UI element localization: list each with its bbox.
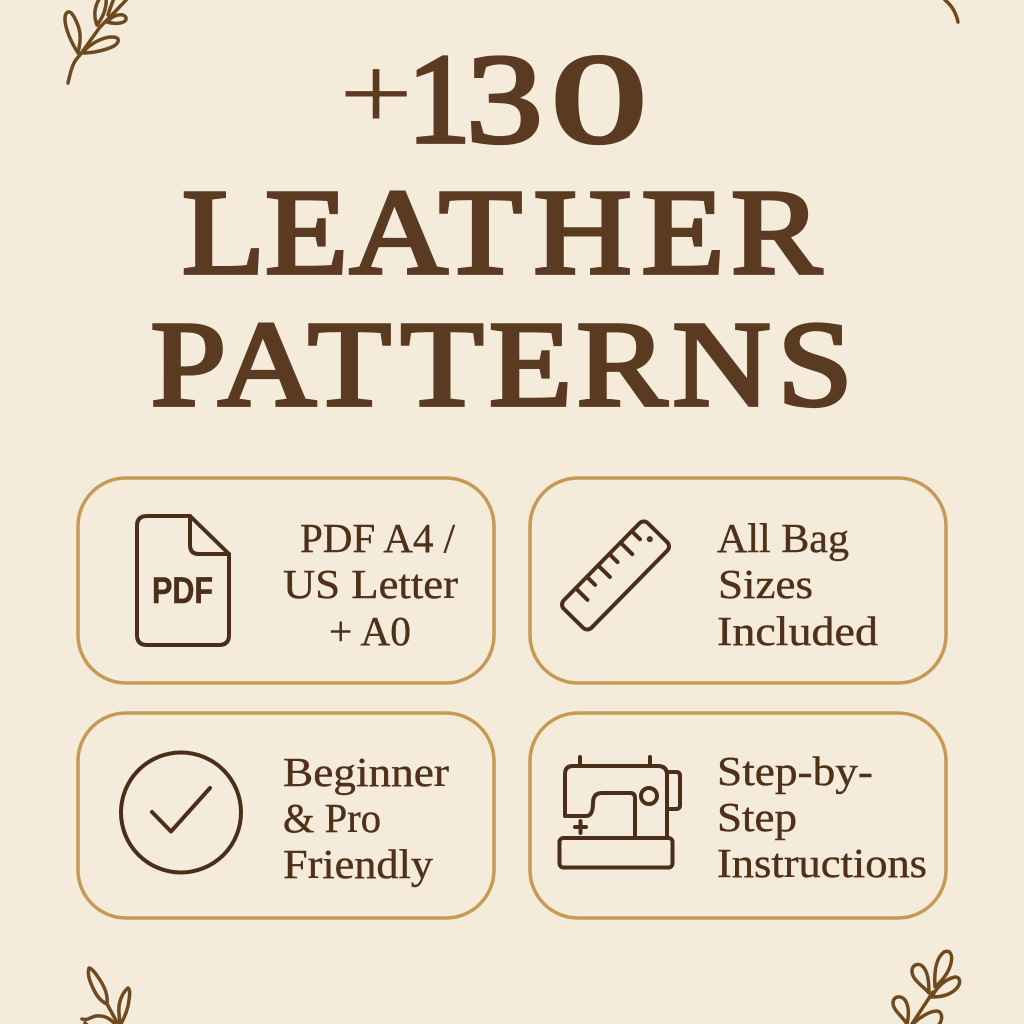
text: instructions: Step-by- <box>717 748 873 794</box>
text: bag sizes: Included <box>717 608 878 654</box>
icon: PDF document: PDF <box>152 570 213 611</box>
title <box>151 28 853 431</box>
text: PDF formats: US Letter <box>283 561 458 607</box>
text: PDF formats <box>283 515 458 654</box>
panel: skill level <box>78 713 494 918</box>
text: skill level: & Pro <box>283 795 381 841</box>
icon: sewing machine <box>560 757 680 868</box>
text: skill level: Beginner <box>283 749 449 795</box>
title: 3 <box>466 28 543 170</box>
panel: instructions <box>530 713 946 918</box>
title: + <box>339 35 413 152</box>
icon: PDF document <box>137 516 229 645</box>
text: skill level <box>283 749 449 887</box>
panel: bag sizes <box>530 478 946 683</box>
decoration: bottom-left sprig <box>82 968 130 1024</box>
decoration: bottom-right sprig <box>893 951 960 1024</box>
title: 0 <box>551 29 647 170</box>
text: bag sizes: Sizes <box>718 561 813 607</box>
icon: check mark in circle <box>121 752 241 872</box>
text: instructions: Step <box>717 794 797 840</box>
text: skill level: Friendly <box>283 841 434 887</box>
text: bag sizes: All Bag <box>717 515 849 561</box>
text: PDF formats: PDF A4 / <box>300 515 456 561</box>
panel: PDF formats <box>78 478 494 683</box>
title: 1 <box>407 28 471 170</box>
icon: ruler <box>560 519 671 632</box>
decoration: top-left sprig <box>65 0 128 83</box>
text: instructions <box>717 748 927 886</box>
text: instructions: Instructions <box>717 840 927 886</box>
text: bag sizes <box>717 515 878 654</box>
title: PATTERNS <box>151 296 853 431</box>
text: PDF formats: + A0 <box>329 608 411 654</box>
decoration: top-right sprig <box>945 0 958 22</box>
title: LEATHER <box>182 164 822 299</box>
